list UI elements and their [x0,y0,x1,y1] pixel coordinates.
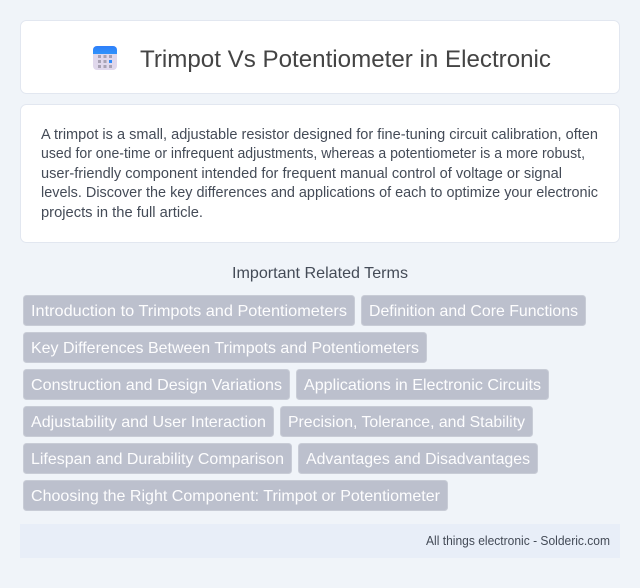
tag [24,370,290,400]
footer credit: All things electronic - Solderic.com [426,534,610,548]
icon: calendar [93,46,117,70]
tag: Adjustability and User Interaction [31,414,266,431]
tag: Key Differences Between Trimpots and Potentiometers [31,340,419,357]
description text: user-friendly component intended for frequent manual control of voltage or signal [41,166,562,182]
title: Trimpot Vs Potentiometer in Electronic [140,46,551,73]
tag [280,406,532,436]
description text: A trimpot is a small, adjustable resistor designed for fine-tuning circuit calibration, often [41,127,598,143]
tag list [24,296,586,510]
tag [24,332,426,362]
heading: important related terms: Important Related Terms [232,265,408,282]
tag: Advantages and Disadvantages [306,451,530,468]
description text [41,127,598,221]
tag: Precision, Tolerance, and Stability [288,414,525,431]
tag: Lifespan and Durability Comparison [31,451,284,468]
tag [24,296,354,326]
tag [296,370,548,400]
header panel [20,20,620,94]
tag [362,296,586,326]
description text: projects in the full article. [41,205,203,221]
tag: Definition and Core Functions [369,303,578,320]
tag [298,444,538,474]
description text: used for one-time or infrequent adjustments, whereas a potentiometer is a more robust, [41,146,585,162]
tag: Applications in Electronic Circuits [304,377,541,394]
tag: Construction and Design Variations [31,377,282,394]
description text: levels. Discover the key differences and applications of each to optimize your electronic [41,185,598,201]
tag: Introduction to Trimpots and Potentiometers [31,303,347,320]
tag [24,444,292,474]
panel: description [20,104,620,242]
footer [20,524,620,558]
tag [24,480,448,510]
tag [24,406,274,436]
tag: Choosing the Right Component: Trimpot or Potentiometer [31,488,441,505]
